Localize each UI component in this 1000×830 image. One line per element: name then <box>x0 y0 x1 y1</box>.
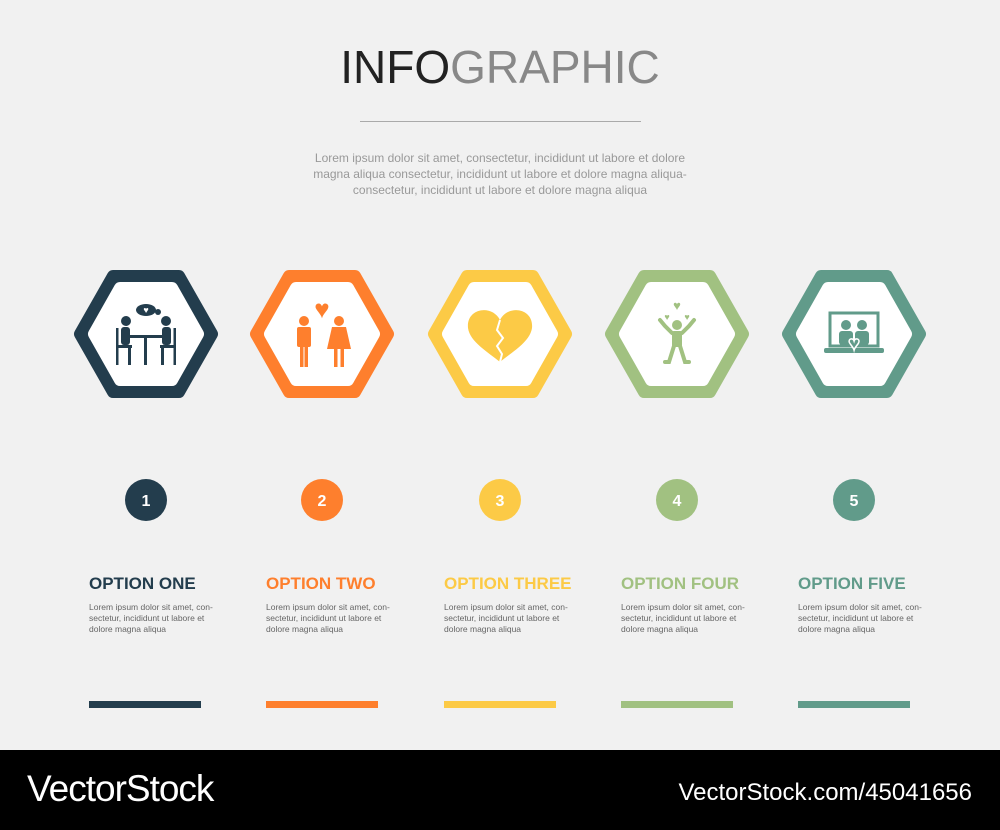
hexagon 4: ♥ <box>684 312 690 322</box>
text: Lorem ipsum dolor sit amet, con-sectetur, incididunt ut labore et dolore magna aliqua <box>444 602 568 634</box>
hexagon 2: ♥ <box>314 294 330 324</box>
number badges: 1 <box>142 493 151 510</box>
hexagon 4 <box>611 276 743 392</box>
text: Lorem ipsum dolor sit amet, con-sectetur, incididunt ut labore et dolore magna aliqua <box>621 602 745 634</box>
footer band <box>0 750 1000 830</box>
text: Lorem ipsum dolor sit amet, con-sectetur, incididunt ut labore et dolore magna aliqua <box>798 602 922 634</box>
hexagon 3 <box>434 276 566 392</box>
number badges: 5 <box>850 493 859 510</box>
number badges: 3 <box>496 493 505 510</box>
subtitle text: Lorem ipsum dolor sit amet, consectetur, incididunt ut labore et dolore <box>315 151 685 165</box>
option five: OPTION FIVE <box>798 574 906 593</box>
subtitle text: magna aliqua consectetur, incididunt ut labore et dolore magna aliqua- <box>313 167 687 181</box>
hexagons and numbers <box>74 270 926 521</box>
text: Lorem ipsum dolor sit amet, con-sectetur, incididunt ut labore et dolore magna aliqua <box>266 602 390 634</box>
footer band: VectorStock.com/45041656 <box>678 779 972 806</box>
option two: OPTION TWO <box>266 574 376 593</box>
number badges: 2 <box>318 493 327 510</box>
hexagon 1 <box>80 276 212 392</box>
title: INFOGRAPHIC <box>340 41 660 93</box>
number badges: 4 <box>673 493 682 510</box>
option four: OPTION FOUR <box>621 574 739 593</box>
hexagon 4: ♥ <box>664 312 670 322</box>
number badges <box>125 479 875 521</box>
text: Lorem ipsum dolor sit amet, con-sectetur, incididunt ut labore et dolore magna aliqua <box>89 602 213 634</box>
hexagon 2 <box>256 276 388 392</box>
option one: OPTION ONE <box>89 574 196 593</box>
hexagon 5 <box>788 276 920 392</box>
subtitle text <box>313 151 687 197</box>
option three: OPTION THREE <box>444 574 572 593</box>
footer band: VectorStock <box>27 768 213 809</box>
hexagon 1: ♥ <box>143 305 149 315</box>
hexagon 4: ♥ <box>673 298 681 313</box>
subtitle text: consectetur, incididunt ut labore et dolore magna aliqua <box>353 183 647 197</box>
hexagon 5: ♥ <box>848 333 860 355</box>
